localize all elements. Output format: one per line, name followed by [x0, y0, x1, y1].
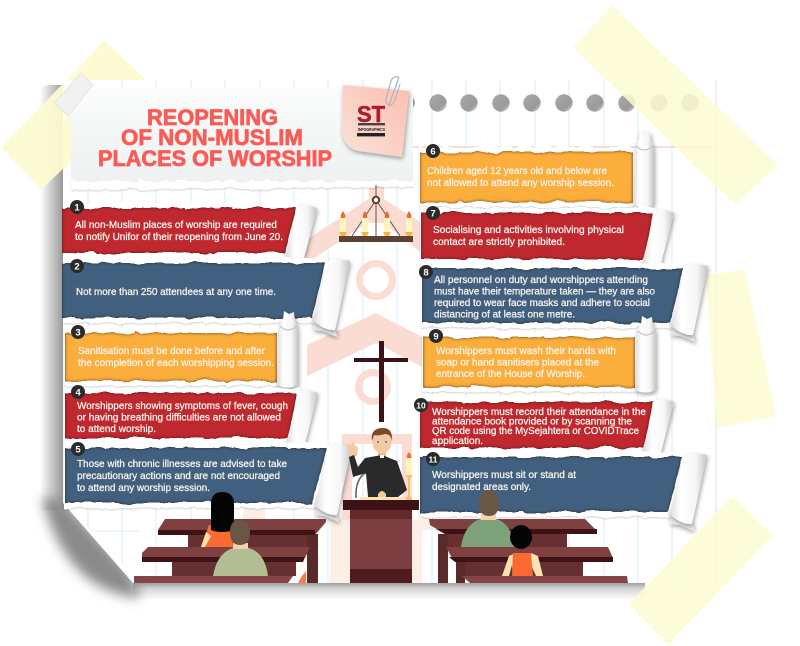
- pastor at lectern: [343, 428, 419, 583]
- title: PLACES OF WORSHIP: [98, 146, 332, 171]
- panel 3: [64, 311, 298, 388]
- panel 4: to attend worship.: [77, 423, 156, 435]
- small white tape: [54, 73, 93, 116]
- paper right edge: [715, 80, 717, 583]
- panel 10: QR code using the MySejahtera or COVIDTrace: [432, 425, 639, 437]
- panel 3: Sanitisation must be done before and after: [78, 345, 265, 357]
- panel 10: [414, 397, 674, 456]
- panel 10: Worshippers must record their attendance in the: [432, 406, 646, 418]
- panel 8: [419, 263, 708, 342]
- panel 6: 6: [430, 146, 436, 158]
- left pews with worshippers: [134, 492, 326, 583]
- tape: top left: [0, 39, 147, 191]
- panel 1: 1: [74, 202, 80, 214]
- background church illustration: [243, 183, 434, 583]
- title: OF NON-MUSLIM: [121, 125, 303, 150]
- panel 7: [420, 206, 674, 267]
- paper sheet: [63, 80, 716, 583]
- panel 2: Not more than 250 attendees at any one time.: [76, 286, 276, 298]
- tape: bottom right: [627, 495, 774, 646]
- panel 1: [62, 200, 317, 262]
- title: [98, 105, 332, 171]
- panel 3: 3: [75, 328, 81, 338]
- panel 7: contact are strictly prohibited.: [433, 236, 565, 248]
- panel 9: entrance of the House of Worship.: [436, 368, 585, 380]
- panel 11: designated areas only.: [432, 481, 531, 493]
- panel 5: [64, 442, 352, 522]
- panel 8: All personnel on duty and worshippers attending: [434, 274, 648, 286]
- panel 8: required to wear face masks and adhere to social: [434, 297, 650, 309]
- tape: right: [706, 268, 776, 429]
- panel 1: All non-Muslim places of worship are required: [75, 219, 277, 231]
- panel 6: Children aged 12 years old and below are: [427, 165, 607, 177]
- panel 10: application.: [432, 435, 483, 447]
- panel 5: Those with chronic illnesses are advised to take: [77, 458, 287, 470]
- panel 4: [64, 385, 318, 447]
- panel 5: to attend any worship session.: [77, 482, 210, 494]
- panel 9: soap or hand sanitisers placed at the: [436, 356, 599, 368]
- punched holes: [399, 94, 699, 112]
- panel 10: attendance book provided or by scanning the: [432, 416, 632, 428]
- panel 2: [62, 258, 350, 337]
- tape: top right: [573, 4, 778, 205]
- panel 9: 9: [433, 332, 439, 342]
- panel 4: or having breathing difficulties are not allowed: [77, 412, 281, 424]
- panel 4: 4: [75, 388, 81, 398]
- header panel: [71, 88, 413, 190]
- paperclip: [386, 77, 400, 105]
- panel 8: must have their temperature taken — they are also: [434, 286, 655, 298]
- panel 9: Worshippers must wash their hands with: [436, 345, 616, 357]
- sticky note logo: INFOGRAPHICS: [358, 127, 385, 132]
- panel 5: 5: [75, 444, 81, 456]
- panel 2: 2: [74, 262, 80, 272]
- panel 5: precautionary actions and are not encouraged: [77, 470, 280, 482]
- right pews with worshippers: [429, 490, 628, 583]
- panel 11: [419, 452, 707, 531]
- cross: [354, 341, 408, 422]
- panel 6: not allowed to attend any worship session.: [427, 177, 614, 189]
- title: REOPENING: [147, 105, 278, 130]
- panel 7: 7: [430, 208, 436, 220]
- panel 4: Worshippers showing symptoms of fever, cough: [77, 400, 288, 412]
- panel 7: Socialising and activities involving physical: [433, 224, 624, 236]
- panel 3: the completion of each worshipping session.: [78, 357, 274, 369]
- panel 1: to notify Unifor of their reopening from June 20.: [75, 231, 283, 243]
- panel 11: 11: [428, 454, 438, 464]
- panel 8: distancing of at least one metre.: [434, 308, 575, 320]
- ruled lines: [88, 80, 716, 583]
- panel 8: 8: [423, 268, 429, 278]
- paper shadow: [40, 85, 645, 600]
- panel 6: [419, 131, 654, 208]
- sticky note logo: [342, 85, 409, 157]
- panel 10: 10: [416, 400, 426, 410]
- panel 11: Worshippers must sit or stand at: [432, 469, 576, 481]
- tape edge on paper: [63, 113, 71, 170]
- sticky note logo: ST: [357, 101, 385, 127]
- panel 9: [422, 316, 656, 392]
- chandelier: [339, 185, 413, 242]
